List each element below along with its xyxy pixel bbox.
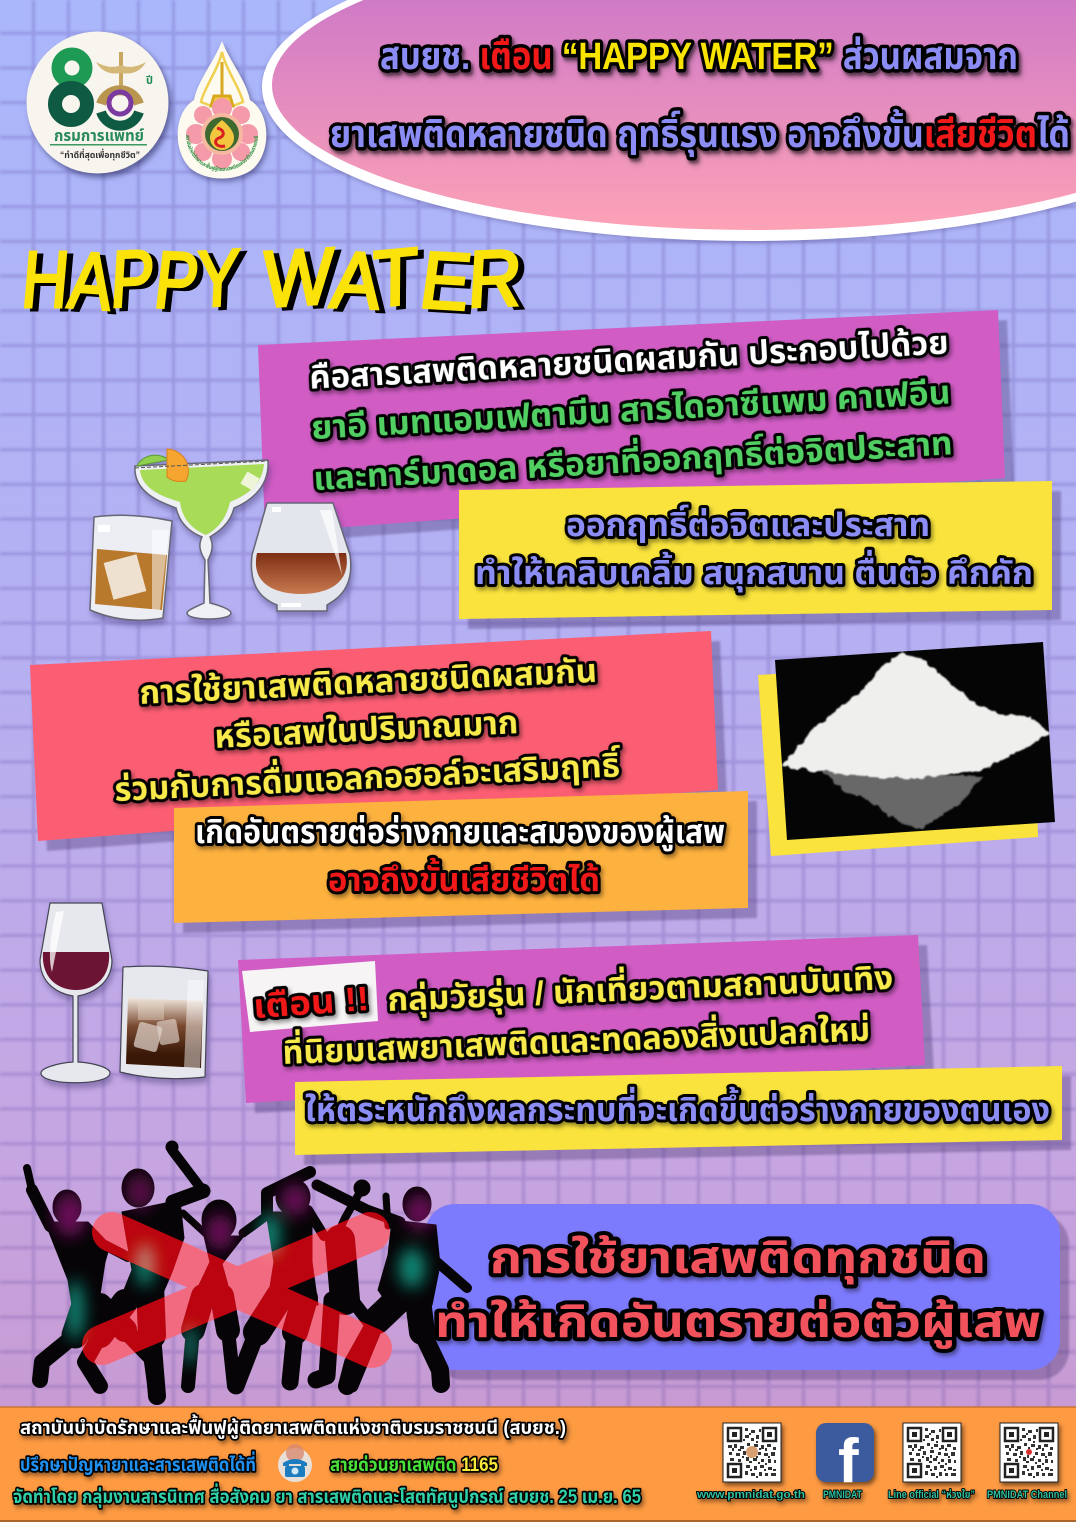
logo: Department of Medical Services 80 years <box>26 32 168 174</box>
panel: warning to teens <box>238 935 925 1103</box>
panel text: mental effects: ออกฤทธิ์ต่อจิตและประสาท <box>566 504 930 543</box>
panel text: composition: ยาอี เมทแอมเฟตามีน สารไดอาซีแพม คาเฟอีน <box>310 373 951 446</box>
panel text: mental effects <box>475 504 1033 593</box>
closing message text <box>435 1234 1041 1349</box>
QR captions <box>696 1488 1067 1501</box>
heading: HAPPY WATER: WATER <box>256 230 527 327</box>
footer: institute name: สถาบันบำบัดรักษาและฟื้นฟูผู้ติดยาเสพติดแห่งชาติบรมราชชนนี (สบยช.) <box>20 1414 566 1439</box>
panel: what it is <box>258 310 1005 533</box>
panel text: target group <box>282 954 894 1071</box>
icon: margarita glass <box>135 449 268 619</box>
panel text: danger warning: เกิดอันตรายต่อร่างกายและสมองของผู้เสพ <box>195 813 725 852</box>
panel text: target group: ที่นิยมเสพยาเสพติดและทดลองสิ่งแปลกใหม่ <box>282 1005 871 1071</box>
icon: Facebook: f <box>838 1427 859 1496</box>
header title: สบยช. เตือน “HAPPY WATER” ส่วนผสมจาก <box>380 36 1018 78</box>
panel: danger <box>174 791 748 923</box>
panel text: target group: กลุ่มวัยรุ่น / นักเที่ยวตามสถานบันเทิง <box>386 954 894 1020</box>
panel: effects on mind <box>459 481 1052 619</box>
panel text: mixing risk: การใช้ยาเสพติดหลายชนิดผสมกัน <box>139 652 598 711</box>
QR: channel <box>1000 1423 1058 1482</box>
QR captions: www.pmnidat.go.th <box>696 1489 805 1501</box>
closing message text: การใช้ยาเสพติดทุกชนิด <box>490 1234 986 1285</box>
panel text: awareness message: ให้ตระหนักถึงผลกระทบที่จะเกิดขึ้นต่อร่างกายของตนเอง <box>305 1086 1050 1128</box>
QR: line official <box>903 1423 961 1482</box>
footer: credit line: จัดทำโดย กลุ่มงานสารนิเทศ สื่อสังคม ยา สารเสพติดและโสตทัศนูปกรณ์ สบยช. 25 เม.ย. 65 <box>13 1483 641 1508</box>
photo: white powder <box>758 642 1055 856</box>
logo: PMNIDAT institute seal <box>176 41 272 185</box>
QR captions: Line official “ห่วงใย” <box>888 1488 975 1501</box>
header title <box>330 36 1070 157</box>
closing message text: ทำให้เกิดอันตรายต่อตัวผู้เสพ <box>435 1298 1041 1349</box>
footer: hotline number: สายด่วนยาเสพติด 1165 <box>330 1454 498 1476</box>
panel text: danger warning: อาจถึงขั้นเสียชีวิตได้ <box>328 857 600 898</box>
panel text: mixing risk <box>113 652 622 808</box>
panel text: mixing risk: หรือเสพในปริมาณมาก <box>214 703 519 755</box>
logo: Department of Medical Services 80 years: กรมการแพทย์ <box>54 128 144 145</box>
icon: Facebook <box>816 1423 874 1496</box>
logo: Department of Medical Services 80 years: “ทำดีที่สุดเพื่อทุกชีวิต” <box>60 148 140 160</box>
panel text: composition: คือสารเสพติดหลายชนิดผสมกัน ประกอบไปด้วย <box>308 323 949 396</box>
icon: brandy glass <box>251 503 351 611</box>
panel: closing message <box>425 1204 1060 1370</box>
header title: ยาเสพติดหลายชนิด ฤทธิ์รุนแรง อาจถึงขั้นเสียชีวิตได้ <box>330 108 1070 157</box>
panel text: composition: และทาร์มาดอล หรือยาที่ออกฤทธิ์ต่อจิตประสาท <box>312 419 953 497</box>
panel text: mixing risk: ร่วมกับการดื่มแอลกอฮอล์จะเสริมฤทธิ์ <box>113 741 622 808</box>
footer bar <box>0 1406 1076 1522</box>
panel: awareness <box>295 1066 1062 1155</box>
icon: iced cola tumbler <box>120 966 208 1079</box>
logo: PMNIDAT institute seal: สถาบันบำบัดรักษาและฟื้นฟูผู้ติดยาเสพติดแห่งชาติบรมราชชนนี <box>186 135 258 172</box>
illustration: crossed-out dancers <box>27 1141 467 1396</box>
panel text: mental effects: ทำให้เคลิบเคลิ้ม สนุกสนาน ตื่นตัว คึกคัก <box>475 549 1033 593</box>
icon: hotline telephone <box>278 1444 312 1482</box>
logo: Department of Medical Services 80 years: ปี <box>145 75 153 87</box>
panel: polydrug risk <box>30 631 718 841</box>
callout: warning label: เตือน !! <box>252 980 370 1026</box>
panel text: composition <box>308 323 953 497</box>
heading: HAPPY WATER: HAPPY <box>18 232 245 326</box>
heading: HAPPY WATER <box>18 230 527 327</box>
QR captions: PMNIDAT <box>823 1489 862 1501</box>
icon: rocks glass with whisky <box>90 515 172 620</box>
QR: website <box>723 1423 781 1482</box>
panel text: danger warning <box>195 813 725 898</box>
icon: wine glass <box>40 903 112 1083</box>
footer: consultation line: ปรึกษาปัญหายาและสารเสพติดได้ที่ <box>20 1451 256 1476</box>
callout: warning label <box>242 961 378 1032</box>
header ellipse banner <box>262 0 1076 241</box>
